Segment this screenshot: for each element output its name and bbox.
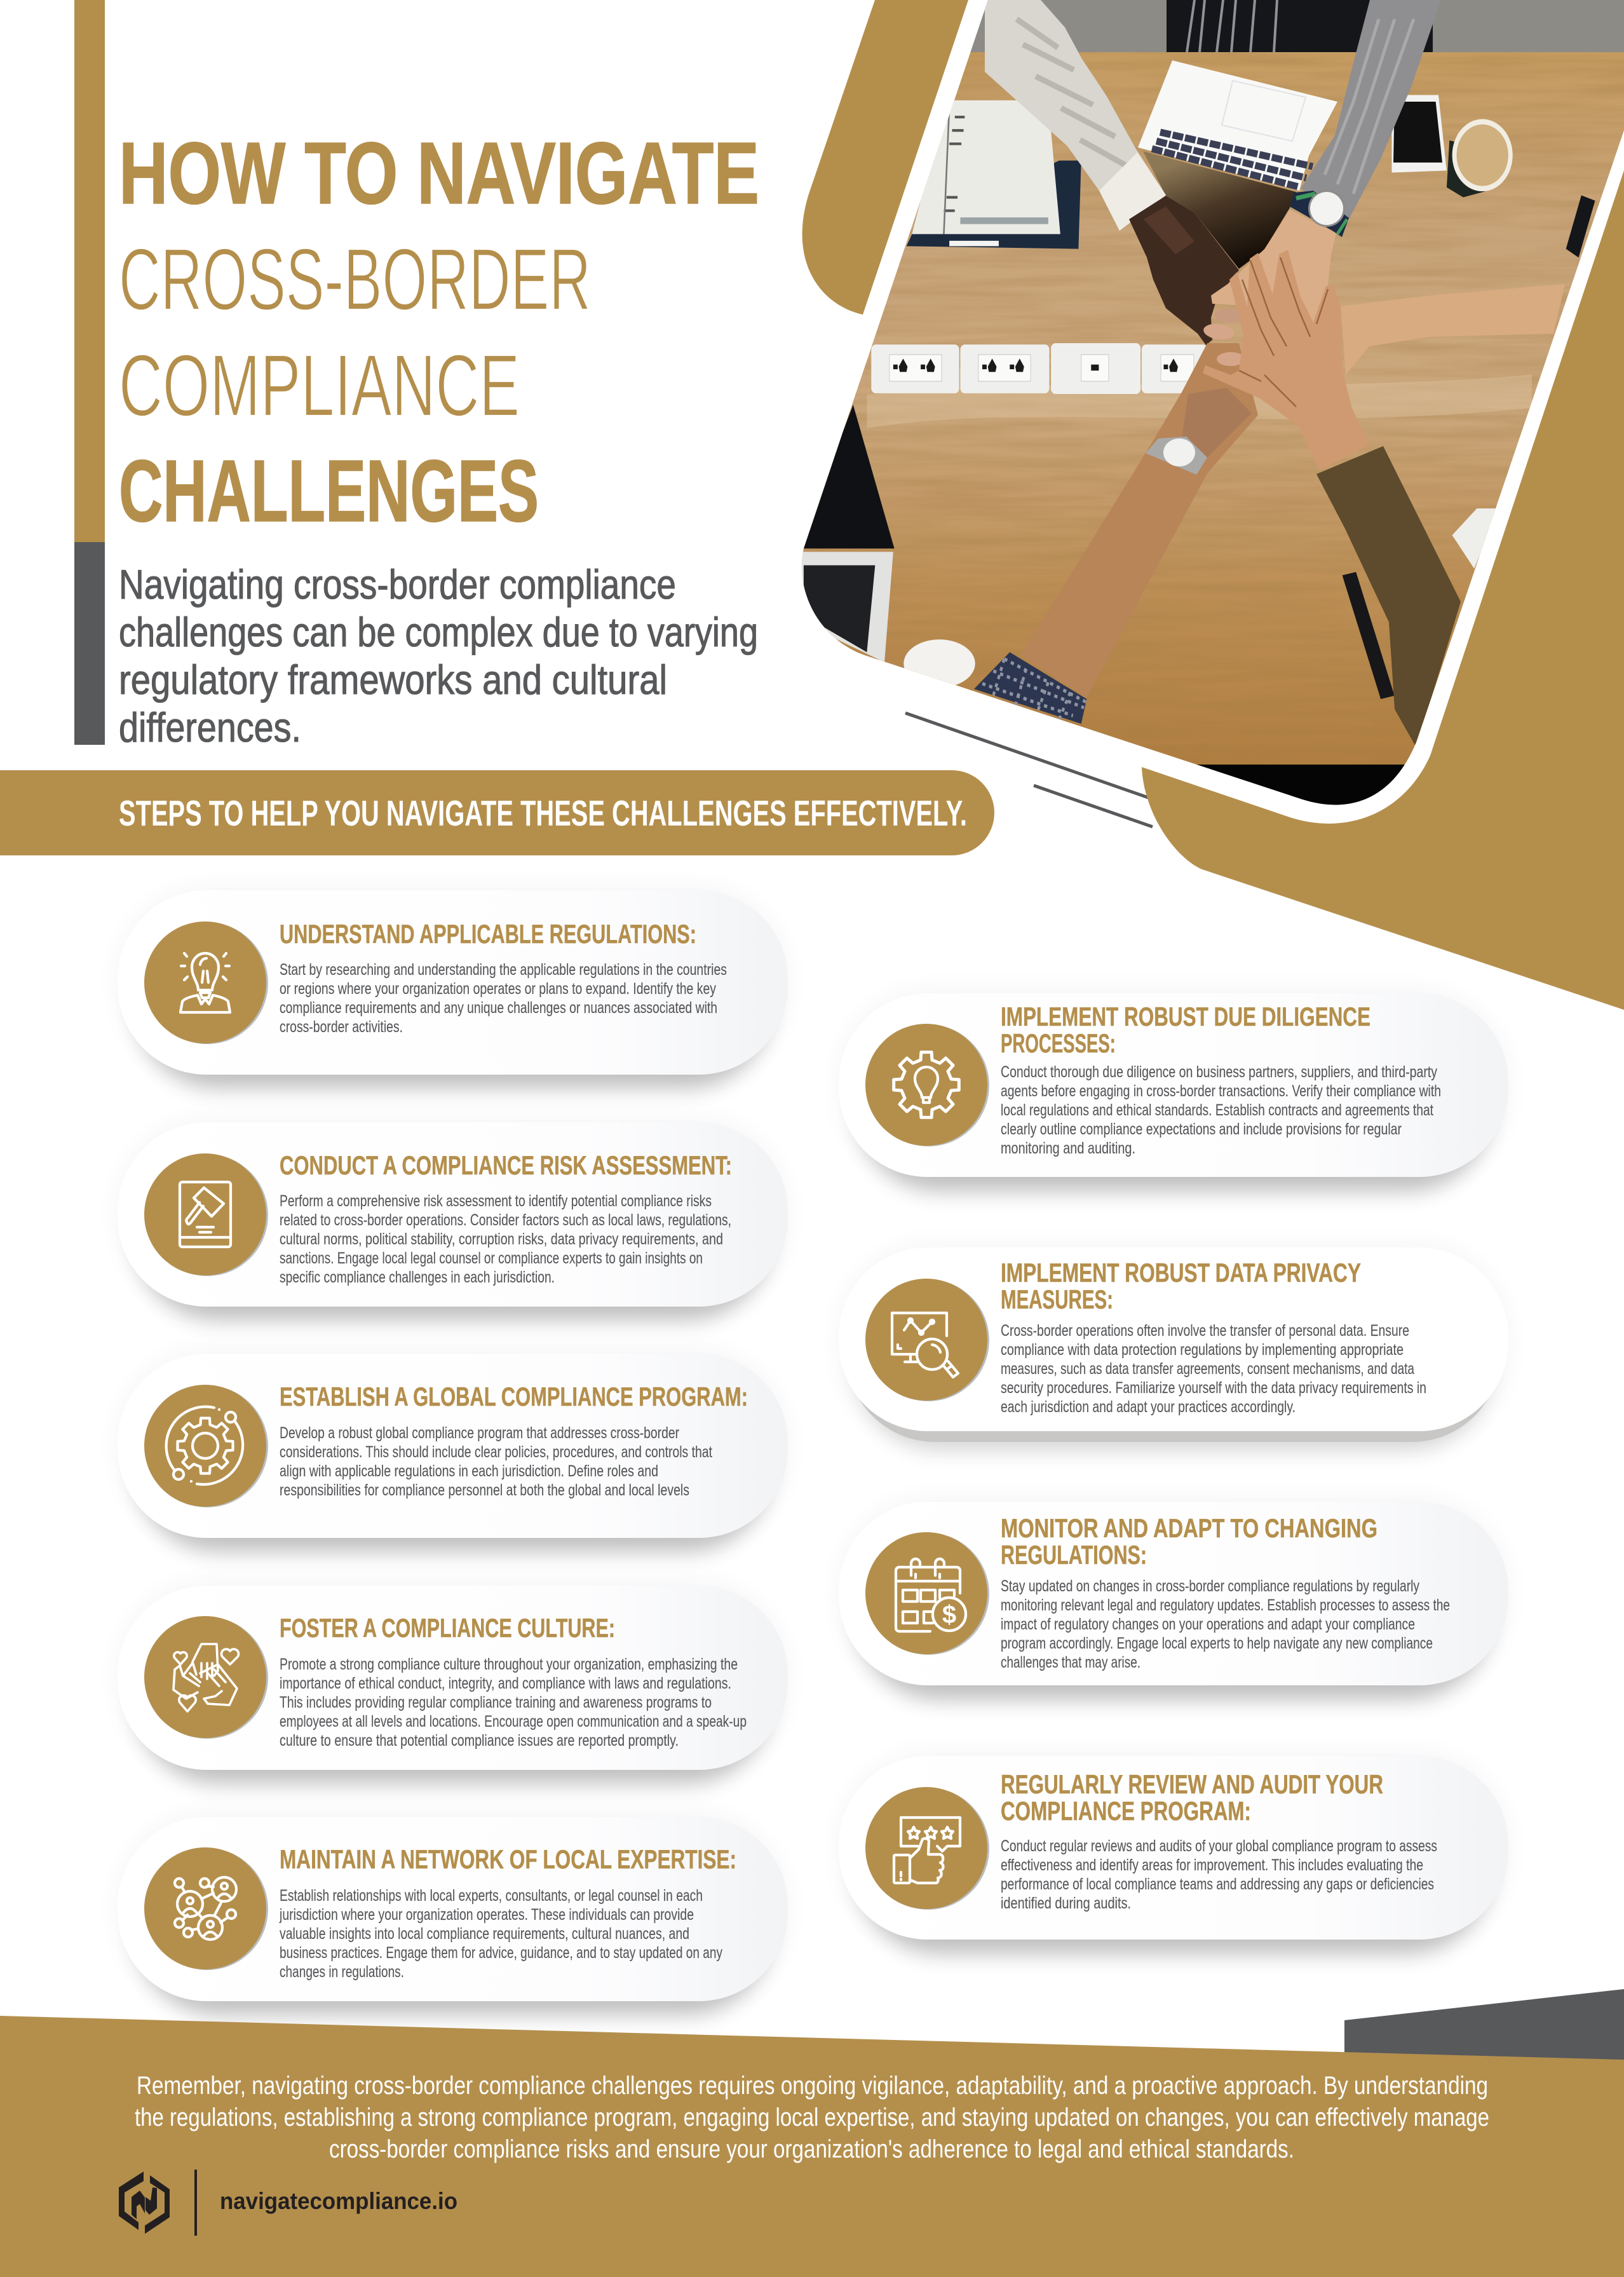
title: CHALLENGES (119, 442, 539, 540)
body text: compliance with data protection regulations by implementing appropriate (1001, 1341, 1404, 1359)
heading: MEASURES: (1001, 1284, 1113, 1314)
body text: related to cross-border operations. Consider factors such as local laws, regulations, (280, 1211, 731, 1229)
body text: Promote a strong compliance culture throughout your organization, emphasizing the (280, 1655, 738, 1673)
logo divider (194, 2170, 197, 2236)
card background (118, 1586, 788, 1770)
card shadow (842, 993, 1505, 1192)
body text: importance of ethical conduct, integrity, and compliance with laws and regulations. (280, 1675, 731, 1692)
heading (1001, 1769, 1383, 1826)
step card: regularly review and audit your compliance program (839, 1756, 1508, 1954)
heading: MAINTAIN A NETWORK OF LOCAL EXPERTISE: (280, 1844, 736, 1874)
steps banner (0, 770, 994, 855)
closing statement: cross-border compliance risks and ensure your organization's adherence to legal and ethical standards. (329, 2135, 1294, 2163)
heading: COMPLIANCE PROGRAM: (1001, 1796, 1251, 1826)
body text: measures, such as data transfer agreements, consent mechanisms, and data (1001, 1360, 1414, 1378)
card shadow (121, 1586, 785, 1784)
body text: performance of local compliance teams and addressing any gaps or deficiencies (1001, 1875, 1434, 1893)
step card: maintain a network of local expertise (118, 1817, 788, 2015)
heading: REGULARLY REVIEW AND AUDIT YOUR (1001, 1769, 1383, 1799)
body text: Start by researching and understanding the applicable regulations in the countries (280, 961, 727, 979)
body text (1001, 1577, 1450, 1671)
icon: monitor and magnifier (865, 1279, 989, 1401)
body text: responsibilities for compliance personnel at both the global and local levels (280, 1481, 689, 1499)
intro paragraph: Navigating cross-border compliance (119, 561, 676, 608)
icon: calendar with dollar coin (865, 1532, 989, 1655)
body text: monitoring relevant legal and regulatory updates. Establish processes to assess the (1001, 1596, 1450, 1614)
body text: impact of regulatory changes on your operations and adapt your compliance (1001, 1615, 1415, 1633)
body text: local regulations and ethical standards. Establish contracts and agreements that (1001, 1101, 1433, 1119)
body text (1001, 1837, 1437, 1912)
body text: effectiveness and identify areas for improvement. This includes evaluating the (1001, 1856, 1423, 1874)
body text: Develop a robust global compliance program that addresses cross-border (280, 1424, 679, 1442)
body text (280, 961, 727, 1036)
body text: culture to ensure that potential compliance issues are reported promptly. (280, 1732, 679, 1750)
body text (280, 1192, 731, 1286)
heading: MONITOR AND ADAPT TO CHANGING (1001, 1513, 1377, 1543)
body text: Perform a comprehensive risk assessment to identify potential compliance risks (280, 1192, 712, 1210)
title: HOW TO NAVIGATE (119, 125, 759, 222)
heading: PROCESSES: (1001, 1028, 1116, 1058)
body text: challenges that may arise. (1001, 1654, 1140, 1671)
step card: monitor and adapt to changing regulations (839, 1502, 1508, 1700)
heading: REGULATIONS: (1001, 1540, 1147, 1570)
intro paragraph: differences. (119, 704, 301, 751)
body text: cultural norms, political stability, corruption risks, data privacy requirements, and (280, 1230, 723, 1248)
body text: each jurisdiction and adapt your practices accordingly. (1001, 1398, 1296, 1416)
icon: gear with lightbulb (865, 1024, 989, 1146)
intro paragraph: regulatory frameworks and cultural (119, 656, 667, 703)
body text: considerations. This should include clear policies, procedures, and controls that (280, 1443, 712, 1461)
body text (280, 1655, 747, 1750)
logo wordmark: navigatecompliance.io (220, 2188, 457, 2214)
footer dark accent (1344, 1989, 1624, 2072)
accent lines (905, 713, 1153, 827)
card background (118, 890, 788, 1075)
body text: agents before engaging in cross-border transactions. Verify their compliance with (1001, 1082, 1441, 1100)
icon: people network (144, 1847, 268, 1970)
card background (839, 993, 1508, 1177)
body text: identified during audits. (1001, 1894, 1131, 1912)
body text: Stay updated on changes in cross-border compliance regulations by regularly (1001, 1577, 1419, 1595)
body text: employees at all levels and locations. Encourage open communication and a speak-up (280, 1713, 747, 1730)
body text: This includes providing regular compliance training and awareness programs to (280, 1694, 712, 1711)
body text: changes in regulations. (280, 1963, 404, 1981)
body text: business practices. Engage them for advice, guidance, and to stay updated on any (280, 1944, 722, 1962)
body text (279, 1887, 722, 1981)
icon: joined hands and hearts (144, 1616, 268, 1739)
body text: monitoring and auditing. (1001, 1139, 1135, 1157)
heading: UNDERSTAND APPLICABLE REGULATIONS: (280, 919, 696, 949)
body text: security procedures. Familiarize yourself with the data privacy requirements in (1001, 1379, 1426, 1397)
icon: calendar with dollar coin: $ (942, 1601, 956, 1629)
title (119, 125, 759, 540)
photo: team hands stacked on wooden table (762, 0, 1624, 831)
card background (839, 1247, 1508, 1431)
body text: program accordingly. Engage local experts to help navigate any new compliance (1001, 1635, 1433, 1652)
body text: valuable insights into local compliance requirements, cultural nuances, and (280, 1925, 689, 1943)
icon: lightbulb person (144, 921, 268, 1044)
title: COMPLIANCE (119, 337, 520, 435)
steps banner: STEPS TO HELP YOU NAVIGATE THESE CHALLENGES EFFECTIVELY. (119, 793, 967, 834)
card shadow (121, 890, 785, 1089)
step card: establish a global compliance program (118, 1354, 788, 1552)
step card: implement robust data privacy measures (839, 1247, 1508, 1451)
body text: sanctions. Engage local legal counsel or compliance experts to gain insights on (280, 1249, 703, 1267)
step card: conduct a compliance risk assessment (118, 1122, 788, 1321)
icon: law book with gavel (144, 1153, 268, 1276)
icon: thumbs up with star rating (865, 1787, 989, 1910)
heading: CONDUCT A COMPLIANCE RISK ASSESSMENT: (280, 1150, 732, 1180)
step card: understand applicable regulations (118, 890, 788, 1089)
body text: jurisdiction where your organization operates. These individuals can provide (279, 1906, 694, 1924)
body text: align with applicable regulations in each jurisdiction. Define roles and (280, 1462, 658, 1480)
card shadow (842, 1756, 1505, 1954)
closing statement (135, 2072, 1489, 2163)
body text: Conduct regular reviews and audits of your global compliance program to assess (1001, 1837, 1437, 1855)
body text (1001, 1322, 1426, 1416)
card shadow (121, 1354, 785, 1552)
card shadow (842, 1247, 1505, 1451)
heading (1001, 1258, 1361, 1314)
heading: ESTABLISH A GLOBAL COMPLIANCE PROGRAM: (280, 1382, 748, 1411)
heading: IMPLEMENT ROBUST DUE DILIGENCE (1001, 1002, 1370, 1031)
step card: implement robust due diligence processes (839, 993, 1508, 1192)
intro paragraph: challenges can be complex due to varying (119, 609, 758, 655)
heading (1001, 1513, 1377, 1570)
footer band (0, 2016, 1624, 2277)
body text: Conduct thorough due diligence on business partners, suppliers, and third-party (1001, 1063, 1437, 1081)
body text: Cross-border operations often involve the transfer of personal data. Ensure (1001, 1322, 1409, 1340)
card background (839, 1756, 1508, 1940)
body text: compliance requirements and any unique challenges or nuances associated with (280, 999, 717, 1017)
logo: navigatecompliance.io (119, 2170, 457, 2236)
step card: foster a compliance culture (118, 1586, 788, 1784)
icon: gear with orbit (144, 1385, 268, 1507)
decorative gold shape: right (1142, 170, 1624, 1010)
body text: specific compliance challenges in each jurisdiction. (280, 1268, 555, 1286)
header accent bar (74, 0, 105, 745)
intro paragraph (119, 561, 758, 751)
card shadow (121, 1122, 785, 1321)
card shadow (121, 1817, 785, 2015)
decorative gold shape: top (802, 0, 968, 315)
heading (1001, 1002, 1370, 1058)
card shadow (842, 1502, 1505, 1700)
body text: Establish relationships with local experts, consultants, or legal counsel in each (280, 1887, 703, 1905)
body text (1001, 1063, 1441, 1157)
heading: IMPLEMENT ROBUST DATA PRIVACY (1001, 1258, 1361, 1288)
logo mark (119, 2172, 170, 2234)
title: CROSS-BORDER (119, 231, 591, 329)
card background (118, 1817, 788, 2001)
body text (280, 1424, 712, 1499)
card background (839, 1502, 1508, 1685)
body text: clearly outline compliance expectations and include provisions for regular (1001, 1120, 1402, 1138)
card background (118, 1354, 788, 1538)
body text: cross-border activities. (280, 1018, 403, 1036)
body text: or regions where your organization operates or plans to expand. Identify the key (280, 980, 716, 998)
card background (118, 1122, 788, 1307)
heading: FOSTER A COMPLIANCE CULTURE: (280, 1613, 615, 1643)
